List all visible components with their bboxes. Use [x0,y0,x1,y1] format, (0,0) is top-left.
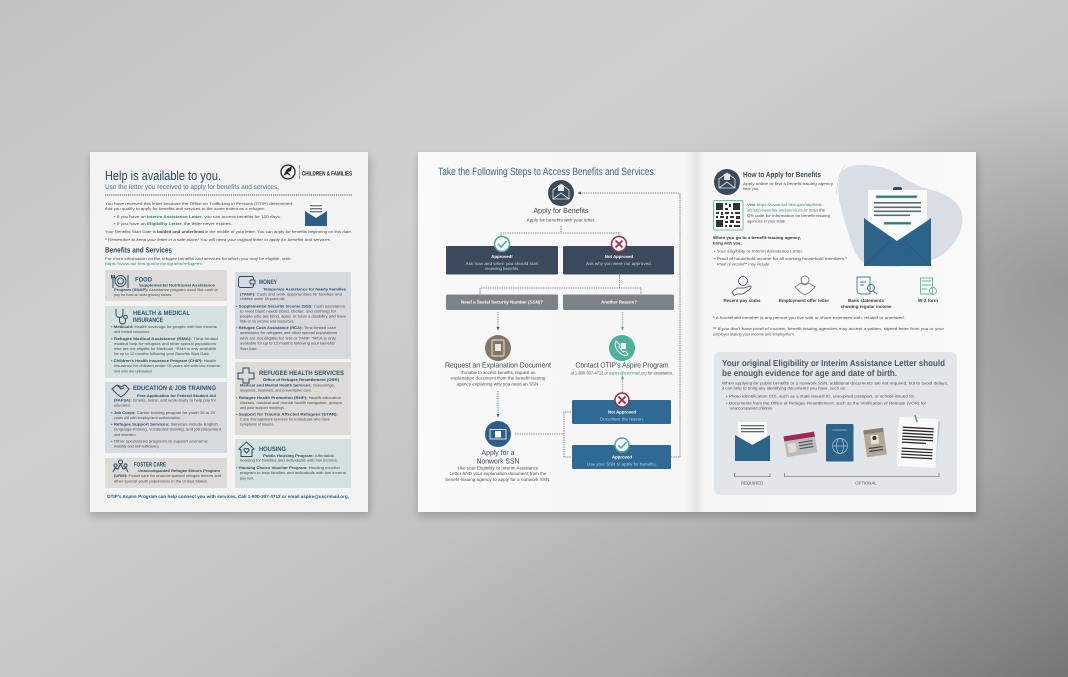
icon: envelope with letter [305,203,327,226]
step: apply for a nonwork SSN: Nonwork SSN [476,456,520,466]
heading: benefits and services: Benefits and Services [105,246,172,254]
panel: education and job training: years old with employment authorization. [114,416,181,420]
arrow: to nonwork SSN [496,391,500,418]
panel: money: to meet basic needs (food, shelter, and clothing) for [240,310,337,314]
icon: family [113,460,128,472]
bracket: optional: OPTIONAL [855,480,877,486]
step: apply for benefits: Apply for benefits with your letter. [526,218,596,222]
panel: booklet right page, how to apply [696,152,976,512]
panel: education and job training: and retention. [114,433,137,437]
text: what to bring: Proof of income** may include: [717,262,770,266]
panel: food [105,270,227,301]
panel: foster care: FOSTER CARE [134,462,167,468]
panel: education and job training: (FAFSA): Grants, loans, and work-study to help pay for [114,398,217,402]
panel: refugee health services: classes, medical and mental health navigation, groups, [240,401,343,405]
step: contact aspire program [570,360,674,376]
labels: proof of income documents: W-2 form [918,298,938,303]
icon: red x [612,236,626,252]
heading: evidence: be enough evidence for age and date of birth. [722,368,897,378]
panel: refugee health services: symptoms of trauma. [240,422,274,426]
box: another reason: Another Reason? [601,300,637,304]
bracket: required: REQUIRED [741,480,763,486]
labels: proof of income documents [724,298,938,309]
footnotes [713,315,945,336]
panel: foster care: other special youth populations in the United States. [114,480,208,484]
panel: refugee health services: Office of Refugee Resettlement (ORR) [263,378,340,382]
subtitle: Use the letter you received to apply for benefits and services. [105,184,279,191]
panel: money: MONEY [259,279,278,286]
step: apply for a nonwork SSN: benefit-issuing agency to apply for a nonwork SSN. [446,477,550,482]
panel: refugee health services: REFUGEE HEALTH SERVICES [259,370,345,377]
panel: housing: housing for families and individuals with low income. [240,458,338,462]
text: visit link: QR code for information on benefit-issuing [747,213,830,218]
panel: education and job training [105,382,227,453]
step: apply for a nonwork SSN: Letter AND your explanation document from the [450,471,547,476]
icon: bank statements [857,277,877,294]
text: how to apply: Apply online or find a benefit-issuing agency [743,181,833,186]
panel: health and medical insurance: for up to 12 months following your Benefits Start Date. [114,352,210,356]
icon: green check [494,236,510,252]
step: contact aspire program: Contact OTIP's Aspire Program [576,360,668,370]
box: not approved, blue [572,400,671,424]
arrow: to explanation document [496,312,500,330]
panel: foster care: Unaccompanied Refugee Minors Program [138,469,221,473]
box: approved, blue [572,445,671,469]
footnotes: * A household member is any person you live with or share expenses with, related or unrelated. [713,315,905,320]
icon: red x [615,393,629,407]
intro text block: that you qualify to apply for benefits and services to the same extent as a refugee. [105,206,265,211]
box: need SSN: Need a Social Security Number (SSN)? [461,300,543,304]
icon: recent pay stubs [732,276,751,296]
panel: health and medical insurance: and who are uninsured. [114,370,153,374]
panel: health and medical insurance: medical help for refugees and other special populations [114,342,216,346]
panel: health and medical insurance: INSURANCE [133,317,164,324]
footnotes: employer stating your income and employment. [713,332,795,336]
icon: green check [615,438,629,452]
panel: education and job training: • Refugee Support Services: Services include English [111,422,218,426]
icon: handshake [112,385,129,397]
icon: contact phone [609,335,635,361]
panel: foster care [105,458,227,488]
panel: housing: Public Housing Program: Affordable [263,454,334,458]
panel: health and medical insurance: and limited resources. [114,330,150,334]
bracket: required [734,473,770,486]
panel: money: assistance for refugees and other special populations [240,331,337,335]
heading: steps: Take the Following Steps to Access Benefits and Services: [438,166,656,178]
panel: refugee health services: diagnosis, treatment, and preventative care. [240,388,312,392]
text: what to bring: • Your Eligibility or Interim Assistance Letter. [714,248,803,254]
panel: food: FOOD [135,276,152,284]
panel: health and medical insurance: • Medicaid: Health coverage for people with low income [111,325,217,329]
box: another reason [563,294,674,310]
text: more information: https://www.acf.hhs.gov/orr/programs/refugees. [105,261,203,266]
bracket: optional [784,473,939,486]
labels: proof of income documents: showing regular income [840,304,892,309]
panel: money: Temporary Assistance for Needy Families [263,288,346,292]
box: approved, blue: Approved [612,454,632,460]
intro text block: • If you have an Interim Assistance Letter , you can access benefits for 120 days. [114,214,281,219]
text: more information [105,256,291,266]
illustration: required letter [735,422,770,461]
step: apply for a nonwork SSN: Apply for a [482,448,515,457]
icon: nonwork SSN card [485,421,511,447]
panel: money: children under 18 years old. [240,297,286,301]
panel: money: (TANF): Cash and work opportunities for families and [240,292,342,296]
icon: W-2 form [920,278,936,294]
panel: refugee health services [235,362,351,435]
panel: refugee health services: and peer support meetings. [240,406,285,410]
panel: education and job training: mobility and self-sufficiency. [114,444,160,448]
labels: proof of income documents: Employment offer letter [779,298,829,303]
intro text block: You have received this letter because the Office on Trafficking in Persons (OTIP) determined [105,201,292,206]
box: not approved [563,246,674,274]
panel: housing: pay rent. [240,476,254,480]
panel: money: • Refugee Cash Assistance (RCA): Time-limited cash [236,326,336,330]
text: documents: • Photo identification (ID), such as a state-issued ID, unexpired passport, or school-issued ID. [726,394,915,398]
icon: explanation document [485,335,511,361]
text: how to apply [743,181,833,191]
panel: money: who are not eligible for SSI or TANF. *RCA is only [240,336,336,340]
box: approved, blue: Use your SSN to apply for benefits. [587,462,657,466]
panel: education and job training: EDUCATION & JOB TRAINING [133,385,216,392]
panel: housing: • Housing Choice Voucher Program: Housing voucher [236,466,341,470]
step: request an explanation document: Request an Explanation Document [445,360,551,370]
step: request an explanation document: If unable to access benefits, request an [460,370,536,375]
logo: children and families: CHILDREN & FAMILIES [302,170,352,178]
box: approved [446,246,558,274]
step: apply for a nonwork SSN: Use your Eligibility or Interim Assistance [458,466,539,470]
panel: food: Program (SNAP): Assistance program used like cash to [114,288,218,292]
text: visit link: Visit https://www.acf.hhs.gov/otip/test- [747,202,824,207]
panel: health and medical insurance: who are not eligible for Medicaid. *RMA is only available [114,347,216,351]
panel: refugee health services: • Refugee Health Promotion (RHP): Health education [236,396,341,400]
text: how to apply: near you. [743,186,759,191]
heading: how to apply: How to Apply for Benefits [743,170,821,179]
text: what to bring: • Proof of household income for all working household members.* [714,256,848,261]
text: documents [722,380,948,410]
text: what to bring: bring with you: [713,240,742,246]
box: approved: receiving benefits. [485,266,519,271]
footer contact line: OTIP's Aspire Program can help connect you with services. Call 1-800-307-4712 or email aspire@uscrimail.org. [107,494,349,499]
icon: medical cross [238,368,254,383]
box: approved: Ask how and when you should start [466,261,539,266]
panel: housing: HOUSING [259,446,286,453]
box: not approved: Ask why you were not approved. [586,261,652,266]
step: apply for a nonwork SSN [446,448,550,482]
box: not approved, blue: Document the reason. [600,416,644,422]
panel: education and job training: Free Application for Federal Student Aid [137,394,217,398]
intro text block: * Remember to keep your letter in a safe place! You will need your original letter to apply for benefits and services. [105,237,331,242]
text: visit link [747,202,830,224]
panel: education and job training: • Other specialized programs to support economic [111,440,208,444]
text: documents: • Documents from the Office of Refugee Resettlement, such as the Verification of Release (VOR) for [726,400,927,406]
step: request an explanation document [445,360,551,386]
panel: health and medical insurance [105,306,227,378]
icon: apply for benefits envelope [548,180,574,206]
arrow: back to contact program [621,376,624,392]
panel: single-page flyer [90,152,368,512]
panel: money: little or no income and resources. [240,320,294,324]
panel: housing [235,439,351,488]
icon: how to apply envelope [714,169,740,195]
panel: housing: program to help families and individuals with low income [240,471,346,475]
heading: evidence: Your original Eligibility or Interim Assistance Letter should [722,358,945,368]
icon: house with heart [239,442,254,456]
arrow: back to apply for benefits [578,192,680,457]
box: approved: Approved! [491,254,513,259]
panel: food: pay for food at most grocery stores. [114,293,172,297]
panel: foster care: (URM): Foster care for unaccompanied refugee minors and [114,474,221,478]
icon: employment offer letter [795,276,815,295]
icon: plate and cutlery [112,275,128,288]
logo: children and families [281,165,352,179]
heading: evidence [722,358,945,378]
panel: money: people who are blind, aged, or have a disability and have [240,314,346,318]
panel: health and medical insurance: • Refugee Medical Assistance (RMA): Time-limited [111,337,218,341]
box: need SSN [446,294,558,310]
text: documents: When applying for public benefits or a nonwork SSN, additional documents are not required, but to avoid delays, [722,380,948,386]
illustration: ID card [783,432,817,457]
panel: evidence of age and date of birth [714,352,957,495]
arrow: to contact program [621,312,624,330]
text: documents: it can help to bring any identifying documents you have, such as: [722,386,846,390]
icon: stethoscope [116,309,127,324]
text: visit link: afs/otip-benefits-and-services or scan the [747,208,825,212]
step: apply for benefits [526,206,596,222]
page shadows [90,156,978,516]
box: not approved: Not Approved [605,254,633,259]
QR code [714,200,743,230]
illustration: blob with envelope and letter [837,165,962,267]
panel: refugee health services: • Support for Trauma Affected Refugees (STAR): [236,412,338,416]
illustration: passport [826,424,854,462]
text: what to bring: When you go to a benefit-issuing agency, [713,235,801,240]
box: not approved, blue: Not Approved [608,410,636,414]
panel: education and job training: education. [114,404,131,408]
connector [515,412,571,457]
footnotes: ** If you don't have proof of income, benefit-issuing agencies may accept a written, signed letter from you or your [713,326,945,331]
step: apply for benefits: Apply for Benefits [534,206,589,215]
connector [501,226,619,238]
intro text block [105,201,352,242]
step: request an explanation document: agency explaining why you need an SSN. [456,382,540,386]
panel: money [235,272,351,359]
panel: health and medical insurance: HEALTH & MEDICAL [133,310,190,317]
step: request an explanation document: explanation document from the benefit-issuing [450,376,546,380]
text: visit link: agencies in your state. [747,218,786,224]
panel: money: Start Date. [240,347,258,351]
panel: refugee health services: Case management services for individuals who have [240,418,330,422]
panel: booklet left page, steps flowchart [418,152,696,512]
connector [480,275,641,294]
icon: wallet [238,276,255,288]
intro text block: Your Benefits Start Date is bolded and underlined in the middle of your letter. You can apply for benefits beginning on this date. [105,229,352,234]
panel: health and medical insurance: • Children's Health Insurance Program (CHIP): Health [111,359,216,363]
intro text block: • If you have an Eligibility Letter , the letter never expires. [114,221,232,226]
illustration: document stack [897,415,940,468]
labels: proof of income documents: Recent pay stubs [724,298,761,303]
text: more information: For more information on the refugee benefits and services for which you may be eligible, visit: [105,256,291,261]
text: documents: unaccompanied children. [730,406,773,410]
illustration: passport: PASSPORT [833,428,848,432]
text: what to bring [713,235,848,266]
panel: refugee health services: Medical and Mental Health Services: Screenings, [240,384,335,388]
labels: proof of income documents: Bank statements [848,298,884,303]
panel: health and medical insurance: insurance for children under 19 years old with low income [114,364,220,368]
panel: education and job training: • Job Corps: Career training program for youth 16 to 24 [111,411,215,415]
panel: education and job training: language training, vocational training, and job placement [114,428,221,432]
title: Help is available to you. [105,168,221,183]
illustration: school ID [863,428,887,457]
panel: money: • Supplemental Security Income (SSI): Cash assistance [236,304,345,308]
panel: money: available for up to 12 months following your Benefits [240,342,335,346]
step: contact aspire program: at 1-800-307-4712 or aspire@uscrimail.org for assistance. [570,370,674,376]
panel: food: Supplemental Nutritional Assistance [139,284,215,288]
